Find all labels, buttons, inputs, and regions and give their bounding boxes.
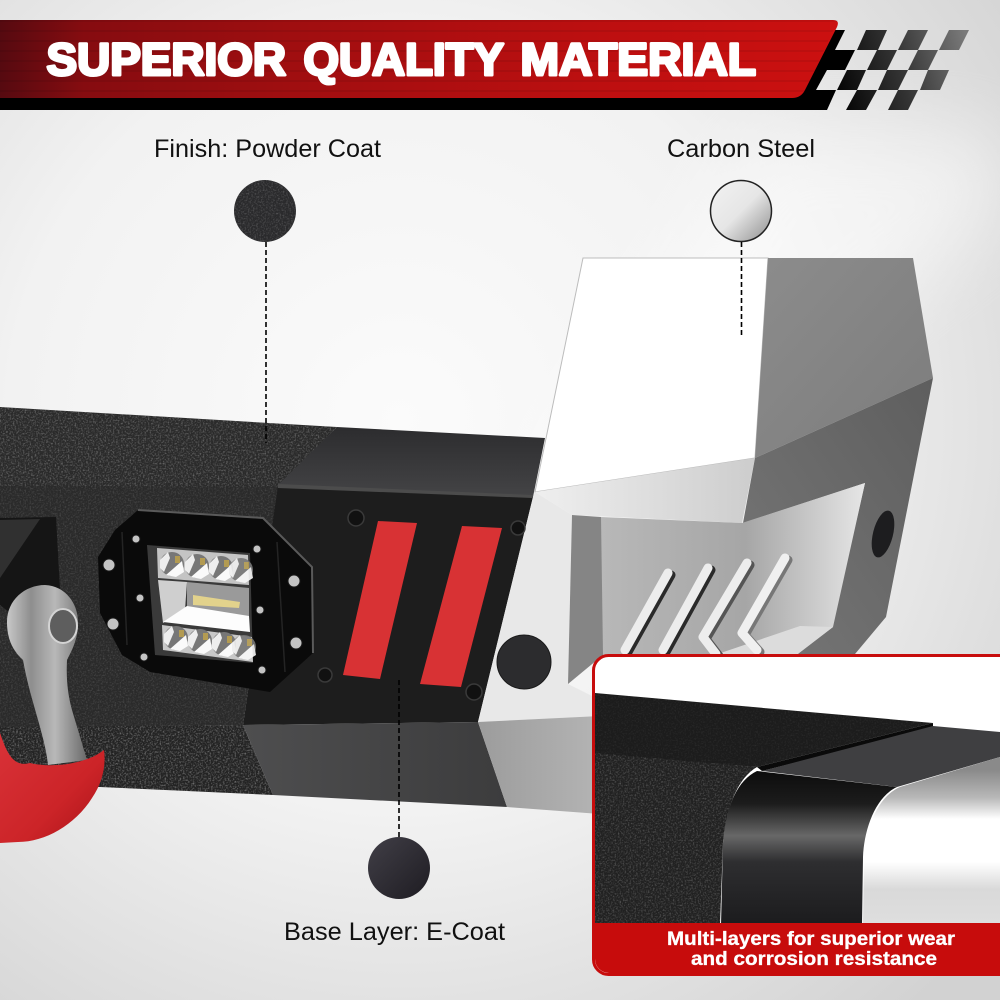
side plug — [867, 508, 899, 560]
plate top edge — [278, 484, 533, 498]
e-coat label: Base Layer: E-Coat — [284, 918, 505, 946]
header banner — [0, 20, 855, 110]
e-coat top face — [762, 726, 1000, 787]
callout: carbon steel — [667, 135, 815, 337]
banner title: SUPERIOR — [46, 34, 286, 85]
steel shackle — [7, 585, 87, 765]
banner shadow strip — [0, 30, 855, 110]
banner title — [46, 34, 756, 85]
background light streak — [520, 130, 1000, 500]
inset frame — [594, 656, 1000, 974]
plate highlight edge — [138, 510, 313, 653]
lower silver facet — [478, 716, 600, 814]
inset caption: and corrosion resistance — [691, 949, 937, 970]
plate bolts — [318, 510, 525, 700]
steel end cap — [478, 258, 933, 814]
grey lower facet — [743, 378, 933, 660]
callout: e-coat — [284, 680, 505, 946]
powder coat swatch — [234, 180, 296, 242]
tail light bars — [318, 510, 525, 700]
powder coat leader line — [265, 242, 267, 443]
right red bar — [420, 526, 502, 687]
white top facet — [535, 258, 768, 492]
shackle and red hook — [0, 585, 105, 843]
bumper body — [0, 407, 545, 807]
caption bar — [595, 923, 1000, 973]
recess left wall — [568, 515, 603, 684]
textured lower face — [0, 725, 273, 795]
left red bar — [343, 521, 417, 679]
shackle mount texture — [0, 519, 40, 578]
lens grey housing — [187, 582, 249, 617]
reflector cups — [160, 552, 256, 660]
coat layer edge — [757, 723, 933, 771]
textured coat front face — [595, 753, 757, 925]
silver middle band — [535, 458, 755, 523]
lens window — [147, 545, 253, 663]
e-coat front face — [721, 771, 897, 925]
grey side facet — [755, 258, 933, 458]
banner title: MATERIAL — [520, 34, 756, 85]
carbon steel leader line — [740, 242, 742, 337]
lower grey panel — [243, 722, 507, 807]
lens top row — [157, 548, 249, 585]
steel core — [863, 757, 1000, 925]
lens middle white strip — [163, 606, 250, 632]
recess floor — [700, 626, 833, 660]
e-coat swatch — [368, 837, 430, 899]
LED work light — [98, 510, 313, 692]
carbon steel label: Carbon Steel — [667, 135, 815, 163]
vent slots — [625, 558, 788, 656]
banner stripes — [0, 20, 838, 98]
inset panel: layer cross-section — [590, 656, 1000, 978]
textured top face — [0, 407, 337, 487]
inset caption: Multi-layers for superior wear — [667, 929, 956, 950]
black top panel — [278, 427, 545, 497]
banner title: QUALITY — [304, 34, 504, 85]
LED strip — [193, 595, 240, 608]
powder coat label: Finish: Powder Coat — [154, 135, 381, 163]
recess back wall — [600, 483, 865, 660]
red hook — [0, 733, 105, 843]
black front plate — [243, 485, 533, 725]
callout: powder coat — [154, 135, 381, 443]
light mounting plate — [98, 510, 313, 692]
e-coat leader line — [398, 680, 400, 837]
textured front face — [0, 486, 278, 728]
front plug — [497, 635, 551, 689]
lens bottom row — [162, 625, 253, 662]
wing dividers — [122, 532, 285, 672]
front silver plate — [478, 492, 600, 722]
plate screws — [103, 535, 302, 674]
inset artwork — [590, 693, 1000, 978]
textured coat top face — [595, 693, 933, 767]
racing checker icon — [837, 30, 969, 110]
carbon steel swatch — [710, 180, 772, 242]
shackle pin — [49, 609, 77, 643]
red banner — [0, 20, 838, 98]
shackle mount — [0, 517, 60, 650]
lens fins — [158, 580, 187, 623]
